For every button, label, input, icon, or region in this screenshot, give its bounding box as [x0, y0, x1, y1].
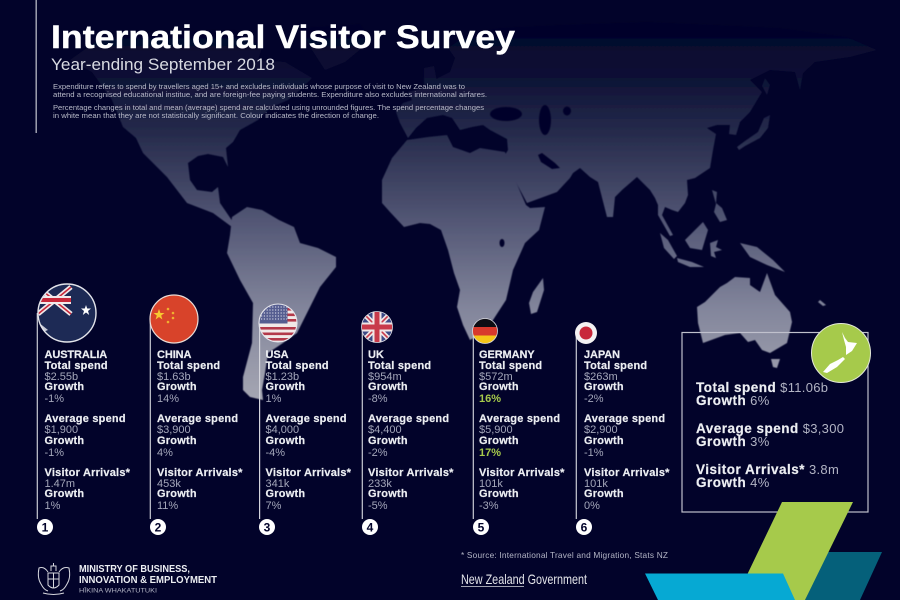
China stats: Total spend — [157, 360, 220, 372]
Japan stats: Growth — [584, 435, 624, 447]
Japan stats: Growth — [584, 381, 624, 393]
Germany stats: Growth — [479, 435, 519, 447]
Germany stats: 16% — [479, 393, 501, 405]
New Zealand Government logo: New Zealand Government — [461, 571, 587, 587]
MBIE wordmark: INNOVATION & EMPLOYMENT — [79, 575, 217, 586]
USA stats: $4,000 — [266, 424, 299, 436]
Germany stats: Total spend — [479, 360, 542, 372]
Germany stats: Average spend — [479, 413, 560, 425]
China stats: 11% — [157, 500, 178, 512]
UK stats: Growth — [368, 381, 408, 393]
badge 2: 2 — [155, 520, 162, 534]
NZ stats: Growth 6% — [696, 393, 770, 408]
USA stats: Average spend — [266, 413, 347, 425]
USA stats: Growth — [266, 488, 305, 500]
map: Java — [677, 258, 704, 267]
column: UK — [361, 311, 454, 535]
China stats: $1.63b — [157, 371, 191, 383]
Japan stats: 0% — [584, 500, 600, 512]
Australia stats: 1% — [44, 500, 61, 512]
Germany stats: Visitor Arrivals* — [479, 467, 565, 479]
USA stats: 1% — [266, 393, 282, 405]
Germany stats: -3% — [479, 500, 499, 512]
Germany stats: 101k — [479, 478, 503, 490]
Australia stats: Growth — [44, 488, 84, 500]
badge 4 — [362, 519, 378, 535]
NZ stats — [696, 380, 844, 490]
Japan stats: Visitor Arrivals* — [584, 467, 670, 479]
column: Germany — [472, 318, 565, 535]
UK stats: UK — [368, 349, 384, 361]
UK stats: Visitor Arrivals* — [368, 467, 454, 479]
badge 3: 3 — [264, 520, 271, 534]
map: Sumatra — [660, 233, 677, 259]
header rule — [36, 0, 37, 133]
badge 5 — [473, 519, 489, 535]
Australia stats: Visitor Arrivals* — [44, 467, 131, 479]
Japan stats: JAPAN — [584, 349, 620, 361]
map: Eurasia — [396, 22, 877, 236]
Germany stats: $572m — [479, 371, 513, 383]
map: New Caledonia — [818, 300, 826, 306]
map: Sulawesi — [710, 240, 722, 258]
flag: Germany — [472, 318, 498, 344]
UK stats: -5% — [368, 500, 388, 512]
map: North America — [70, 30, 312, 228]
USA stats: Visitor Arrivals* — [266, 467, 352, 479]
decorative shape: cyan — [645, 574, 795, 600]
decorative shape: green — [735, 502, 853, 600]
Germany stats: Growth — [479, 488, 519, 500]
Australia stats: $2.55b — [44, 371, 78, 383]
Japan stats: Average spend — [584, 413, 665, 425]
Japan stats: $263m — [584, 371, 618, 383]
MBIE wordmark: MINISTRY OF BUSINESS, — [79, 564, 190, 575]
map: Philippines — [712, 190, 727, 222]
USA stats: -4% — [266, 447, 285, 459]
Japan stats: -1% — [584, 447, 604, 459]
intro text: in white mean that they are not statistically significant. Colour indicates the direction of change. — [53, 111, 379, 120]
China stats: 14% — [157, 393, 179, 405]
China stats: $3,900 — [157, 424, 191, 436]
USA stats: $1.23b — [266, 371, 299, 383]
UK stats: $954m — [368, 371, 402, 383]
NZ stats: Growth 4% — [696, 475, 770, 490]
icon: coat of arms — [38, 563, 70, 594]
MBIE wordmark — [79, 564, 217, 594]
USA stats: 341k — [266, 478, 290, 490]
USA stats: Growth — [266, 381, 305, 393]
UK stats: $4,400 — [368, 424, 402, 436]
intro text: Percentage changes in total and mean (average) spend are calculated using unrounded figures. The spend percentage changes — [53, 103, 484, 112]
USA stats — [266, 349, 352, 512]
Germany stats: 17% — [479, 447, 501, 459]
Australia stats: -1% — [44, 393, 64, 405]
China stats: Average spend — [157, 413, 238, 425]
column: Australia — [37, 284, 131, 535]
flag: China — [150, 295, 198, 343]
intro text: Expenditure refers to spend by travellers aged 15+ and excludes individuals whose purpose of visit to New Zealand was to — [53, 82, 465, 91]
badge 3 — [259, 519, 275, 535]
Australia stats: AUSTRALIA — [44, 349, 107, 361]
MBIE wordmark: HĪKINA WHAKATUTUKI — [79, 586, 157, 594]
badge 4: 4 — [367, 520, 374, 534]
USA stats: Growth — [266, 435, 305, 447]
decorative shape: teal — [805, 552, 882, 600]
badge 6 — [576, 519, 592, 535]
Australia stats: Total spend — [44, 360, 108, 372]
UK stats: -8% — [368, 393, 388, 405]
USA stats: Total spend — [266, 360, 329, 372]
intro text — [53, 82, 487, 120]
Japan stats: 101k — [584, 478, 608, 490]
UK stats: Growth — [368, 435, 408, 447]
map: Borneo — [685, 222, 708, 250]
map: Greenland — [300, 24, 372, 70]
map: Australia — [697, 273, 792, 353]
China stats — [157, 349, 243, 512]
title: International Visitor Survey — [51, 19, 515, 55]
USA stats: 7% — [266, 500, 282, 512]
UK stats: -2% — [368, 447, 388, 459]
badge 1 — [37, 519, 53, 535]
badge 2 — [150, 519, 166, 535]
Germany stats: $5,900 — [479, 424, 513, 436]
world map — [70, 22, 877, 400]
source note: * Source: International Travel and Migration, Stats NZ — [461, 550, 668, 560]
flag: UK — [361, 311, 393, 343]
Australia stats: 1.47m — [44, 478, 75, 490]
Australia stats: -1% — [44, 447, 64, 459]
map: Japan — [737, 115, 770, 150]
China stats: Growth — [157, 488, 197, 500]
Japan stats: Total spend — [584, 360, 647, 372]
map: Africa — [382, 135, 545, 340]
map: inland seas — [490, 105, 571, 247]
China stats: Growth — [157, 435, 197, 447]
flag: USA — [259, 304, 297, 342]
Japan stats: $2,900 — [584, 424, 618, 436]
Australia stats: $1,900 — [44, 424, 78, 436]
UK stats: Average spend — [368, 413, 449, 425]
map: Madagascar — [529, 278, 544, 314]
icon: New Zealand map badge — [812, 324, 870, 382]
Japan stats — [584, 349, 670, 512]
column: USA — [259, 304, 352, 535]
China stats: 453k — [157, 478, 181, 490]
NZ stats: Growth 3% — [696, 434, 770, 449]
flag: Japan — [575, 322, 597, 344]
badge 1: 1 — [42, 520, 49, 534]
UK stats: Growth — [368, 488, 408, 500]
USA stats: USA — [266, 349, 289, 361]
UK stats: Total spend — [368, 360, 431, 372]
China stats: Growth — [157, 381, 197, 393]
Australia stats: Average spend — [44, 413, 126, 425]
NZ stats: Visitor Arrivals* 3.8m — [696, 462, 839, 477]
Australia stats — [44, 349, 131, 512]
column: Japan — [575, 322, 670, 535]
map: South America — [227, 207, 336, 400]
NZ stats: Total spend $11.06b — [696, 380, 828, 395]
UK stats: 233k — [368, 478, 392, 490]
map: New Guinea — [740, 243, 785, 272]
panel: New Zealand totals — [682, 332, 868, 512]
Australia stats: Growth — [44, 381, 84, 393]
China stats: CHINA — [157, 349, 191, 361]
column: China — [150, 295, 243, 535]
NZ stats: Average spend $3,300 — [696, 421, 844, 436]
subtitle: Year-ending September 2018 — [51, 56, 275, 74]
badge 5: 5 — [478, 520, 485, 534]
UK stats — [368, 349, 454, 512]
China stats: 4% — [157, 447, 173, 459]
Japan stats: -2% — [584, 393, 604, 405]
Japan stats: Growth — [584, 488, 624, 500]
map: Britain — [424, 66, 437, 85]
badge 6: 6 — [581, 520, 588, 534]
flag: Australia — [38, 284, 96, 342]
Germany stats: GERMANY — [479, 349, 535, 361]
Germany stats — [479, 349, 565, 512]
Australia stats: Growth — [44, 435, 84, 447]
intro text: attend a recognised educational institue, and are foreign-fee paying students. Expenditure also excludes international airfares. — [53, 90, 487, 99]
map: Sakhalin — [762, 78, 770, 95]
China stats: Visitor Arrivals* — [157, 467, 243, 479]
Germany stats: Growth — [479, 381, 519, 393]
map: Tasmania — [771, 359, 780, 368]
